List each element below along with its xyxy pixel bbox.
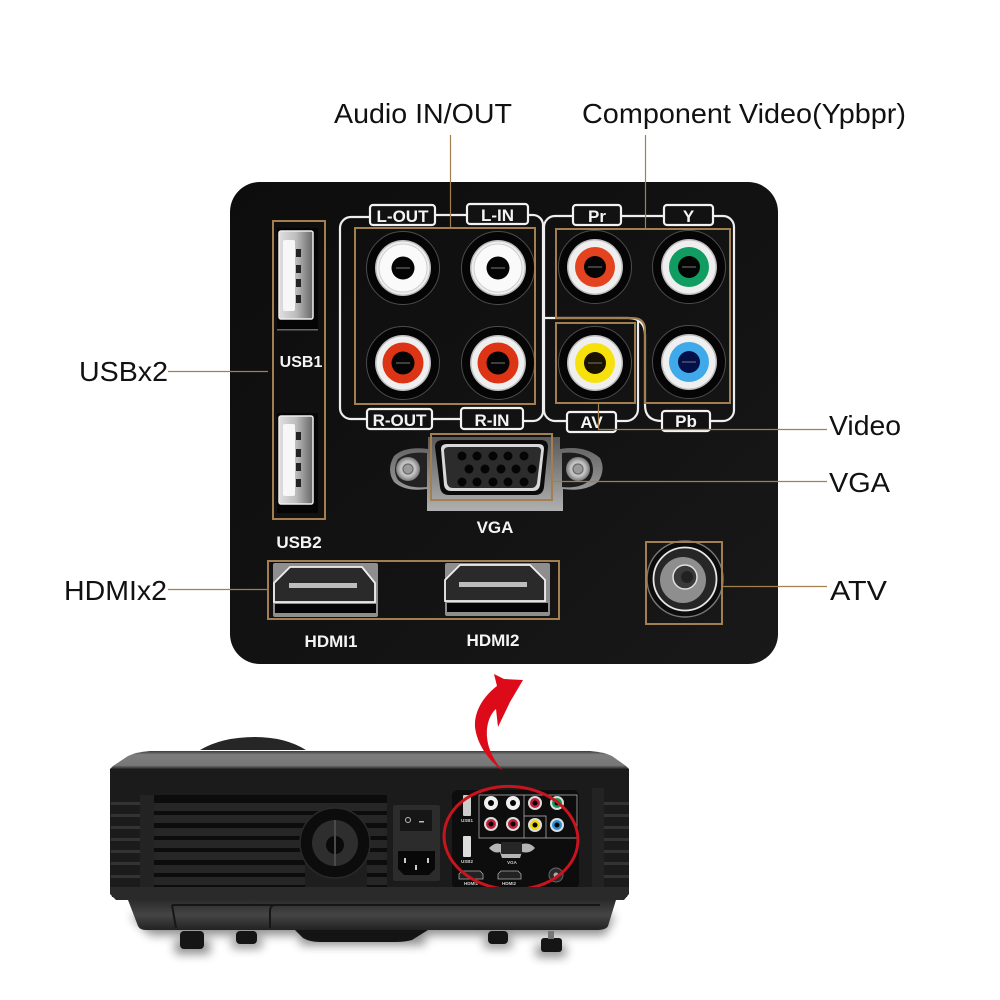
label: VGA: VGA xyxy=(829,467,890,498)
lower body strip xyxy=(110,887,629,900)
mini port panel: HDMI2 xyxy=(502,881,516,886)
port: HDMI1 xyxy=(273,563,378,617)
leader: USB xyxy=(168,370,268,372)
jack: Pb blue xyxy=(652,326,726,398)
side pillars xyxy=(140,788,604,888)
label: USB2: USB2 xyxy=(276,533,322,552)
highlight frame: ATV xyxy=(646,542,722,624)
white outline: audio group xyxy=(340,215,543,421)
jack: AV yellow xyxy=(558,326,632,400)
red arrow xyxy=(475,674,523,771)
tag: Pr: Pr xyxy=(588,207,606,226)
leader: Video xyxy=(598,403,827,430)
heading: Audio IN/OUT: Audio IN/OUT xyxy=(334,98,512,129)
mini port panel: HDMI1 xyxy=(464,881,478,886)
jack: Y green xyxy=(652,230,726,304)
tag: Pb xyxy=(662,411,710,431)
tag: AV xyxy=(567,412,616,432)
mini port panel: USB1 xyxy=(461,818,473,823)
projector xyxy=(110,737,629,957)
body xyxy=(110,769,629,897)
leader: Component xyxy=(644,135,646,228)
heading: Component Video: Component Video(Ypbpr) xyxy=(582,98,906,129)
label: USBx2: USBx2 xyxy=(79,356,168,387)
highlight frame: AV xyxy=(556,323,635,403)
label: HDMI1: HDMI1 xyxy=(305,632,357,651)
center wedge xyxy=(295,930,428,942)
jack: R-OUT red xyxy=(366,326,440,400)
top face xyxy=(110,751,629,769)
jack: L-OUT white xyxy=(366,232,440,304)
leader: VGA xyxy=(552,480,827,482)
red ellipse highlight xyxy=(441,782,581,894)
switch and socket xyxy=(393,805,440,881)
tag: Pr xyxy=(573,205,621,226)
label: HDMI2: HDMI2 xyxy=(467,631,519,650)
dome xyxy=(200,737,306,750)
tag: L-IN xyxy=(467,204,528,225)
label: HDMIx2: HDMIx2 xyxy=(64,575,167,606)
leader: HDMI xyxy=(168,588,268,590)
ground shadow xyxy=(130,915,615,957)
mini port panel: VGA xyxy=(507,860,518,865)
port: USB2 xyxy=(277,413,318,513)
base xyxy=(128,900,616,930)
base divider xyxy=(172,905,600,928)
port: HDMI2 xyxy=(445,563,550,616)
tag: AV: AV xyxy=(580,413,603,432)
port: VGA xyxy=(390,437,603,511)
label: Video: Video xyxy=(829,410,901,441)
jack: R-IN red xyxy=(462,326,534,400)
port: ATV xyxy=(647,541,723,617)
highlight frame: VGA xyxy=(431,434,552,500)
tag: L-IN: L-IN xyxy=(481,206,514,225)
mini port panel: USB2 xyxy=(461,859,473,864)
tag: Pb: Pb xyxy=(675,412,697,431)
jack: Pr red xyxy=(558,230,632,304)
tag: L-OUT: L-OUT xyxy=(377,207,429,226)
white outline: component group xyxy=(544,216,734,421)
tag: R-OUT: R-OUT xyxy=(373,411,427,430)
highlight frame: component xyxy=(556,229,730,403)
tag: Y: Y xyxy=(683,207,695,226)
highlight frame: audio xyxy=(355,228,535,404)
vent xyxy=(154,795,387,887)
tag: R-IN: R-IN xyxy=(475,411,509,430)
side ridges xyxy=(111,802,629,878)
label: VGA: VGA xyxy=(477,518,513,537)
panel: connector close-up xyxy=(230,182,778,664)
feet xyxy=(180,931,562,952)
tag: Y xyxy=(664,205,713,226)
leader: Audio xyxy=(450,135,452,228)
highlight frame: HDMI xyxy=(268,561,559,619)
label: ATV: ATV xyxy=(830,575,887,606)
mini port panel xyxy=(452,790,579,889)
highlight frame: USB xyxy=(273,221,325,519)
port: USB1 xyxy=(277,228,318,330)
tag: R-IN xyxy=(461,408,523,430)
label: USB1: USB1 xyxy=(280,354,322,371)
jack: L-IN white xyxy=(462,232,534,304)
knob xyxy=(300,808,370,888)
leader: ATV xyxy=(722,586,827,588)
